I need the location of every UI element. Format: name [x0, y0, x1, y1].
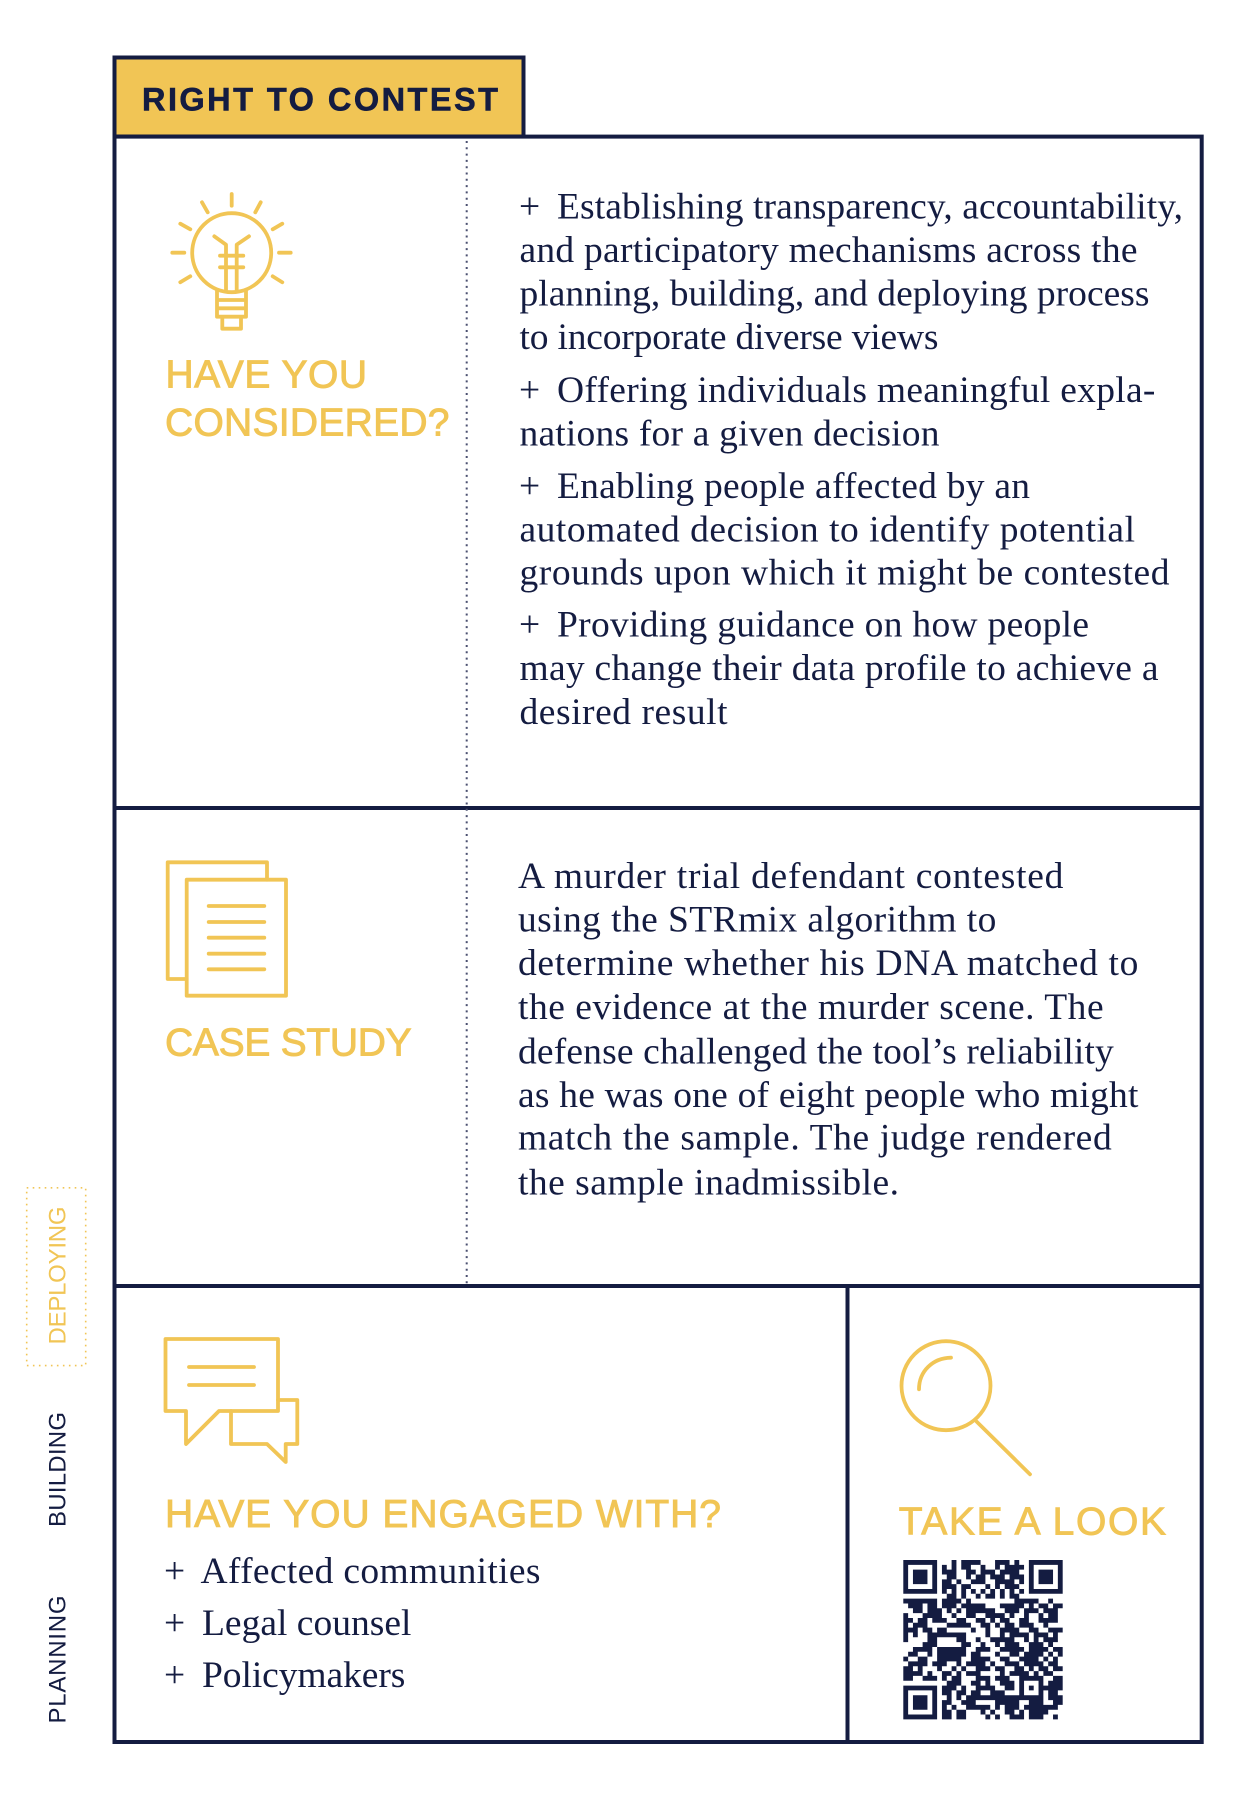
case study text: using the STRmix algorithm to — [518, 900, 996, 941]
QR code — [903, 1560, 1063, 1719]
heading: case study: CASE STUDY — [165, 1021, 412, 1064]
icon: magnifying glass — [902, 1341, 1030, 1474]
heading: take a look: TAKE A LOOK — [899, 1500, 1166, 1543]
building label: BUILDING — [44, 1412, 72, 1527]
icon: documents — [168, 862, 286, 996]
considerations list: may change their data profile to achieve a — [520, 648, 1159, 689]
case study text — [518, 856, 1139, 1203]
considerations list: Enabling people affected by an — [557, 466, 1030, 507]
considerations list: desired result — [520, 692, 728, 733]
considerations list: to incorporate diverse views — [520, 317, 938, 358]
case study text: match the sample. The judge rendered — [518, 1118, 1112, 1159]
main frame with panel dividers — [113, 137, 1203, 1742]
panel: take a look — [899, 1341, 1166, 1719]
considerations list: Providing guidance on how people — [557, 605, 1089, 646]
considerations list: nations for a given decision — [520, 413, 940, 454]
title tab: right to contest — [114, 58, 524, 136]
icon: speech bubbles — [166, 1339, 297, 1462]
stakeholder list: + — [164, 1603, 185, 1644]
heading: have you considered — [165, 353, 450, 445]
heading: have you engaged with: HAVE YOU ENGAGED WITH? — [165, 1493, 721, 1536]
considerations list — [519, 186, 1183, 733]
considerations list: + — [519, 370, 540, 411]
case study text: A murder trial defendant contested — [518, 856, 1064, 897]
considerations list: + — [519, 605, 540, 646]
considerations list: + — [519, 186, 540, 228]
considerations list: planning, building, and deploying process — [520, 273, 1150, 314]
considerations list: automated decision to identify potential — [520, 510, 1135, 550]
case study text: determine whether his DNA matched to — [518, 943, 1138, 984]
heading: have you considered: CONSIDERED? — [165, 402, 450, 445]
case study text: the sample inadmissible. — [518, 1162, 899, 1203]
panel: case study — [165, 856, 1139, 1203]
case study text: the evidence at the murder scene. The — [518, 987, 1104, 1028]
case study text: as he was one of eight people who might — [518, 1075, 1139, 1116]
deploying label with dotted box — [27, 1188, 86, 1366]
title tab: right to contest: RIGHT TO CONTEST — [142, 82, 498, 118]
planning label: PLANNING — [44, 1596, 72, 1724]
panel: have you engaged with — [164, 1339, 721, 1696]
side navigation labels — [27, 1188, 86, 1724]
considerations list: Offering individuals meaningful expla- — [557, 370, 1155, 411]
icon: light bulb — [172, 194, 291, 329]
case study text: defense challenged the tool’s reliability — [518, 1032, 1114, 1073]
panel: have you considered — [165, 186, 1183, 733]
considerations list: and participatory mechanisms across the — [520, 230, 1138, 271]
considerations list: Establishing transparency, accountability, — [557, 186, 1183, 228]
stakeholder list: + — [164, 1551, 185, 1592]
considerations list: grounds upon which it might be contested — [520, 552, 1170, 594]
heading: have you considered: HAVE YOU — [166, 353, 367, 396]
stakeholder list: Legal counsel — [202, 1603, 411, 1644]
stakeholder list: Policymakers — [202, 1655, 405, 1696]
stakeholder list: Affected communities — [200, 1551, 540, 1592]
stakeholder list — [164, 1551, 540, 1696]
considerations list: + — [519, 466, 540, 507]
stakeholder list: + — [164, 1655, 185, 1696]
deploying label with dotted box: DEPLOYING — [44, 1206, 72, 1344]
